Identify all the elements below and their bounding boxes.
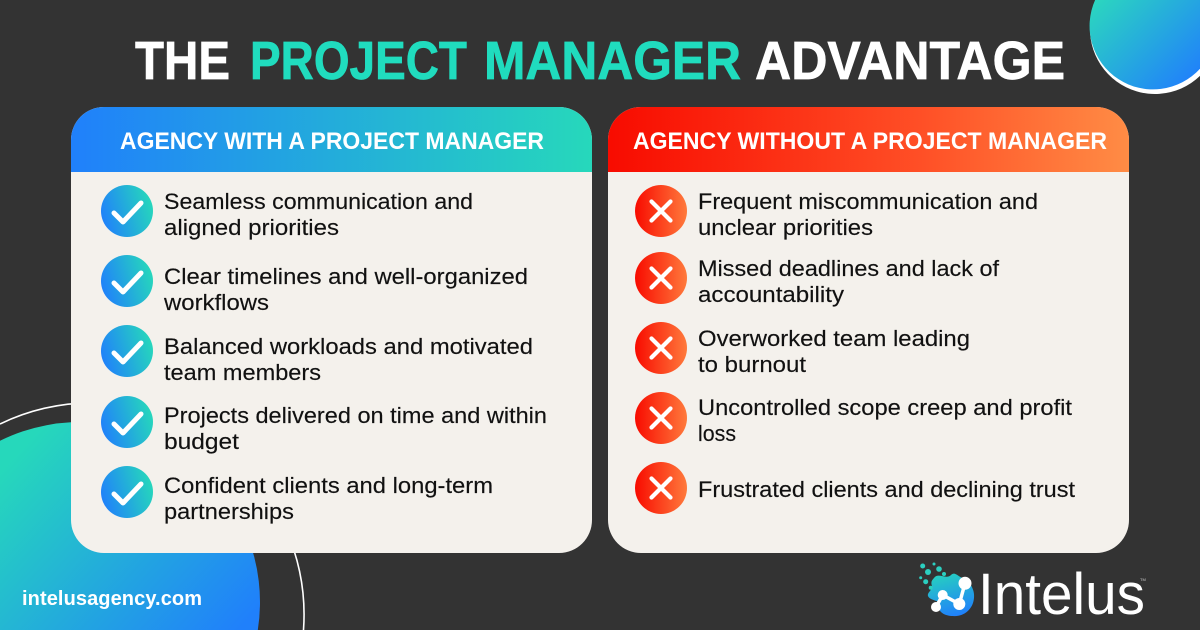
item: frequent miscommunication: unclear priorities	[698, 215, 873, 240]
item: missed deadlines	[635, 252, 1000, 307]
item: seamless communication: Seamless communication and	[164, 189, 473, 214]
item: overworked team	[635, 322, 970, 377]
item: seamless communication	[101, 185, 473, 240]
title	[135, 31, 1065, 91]
panel header	[71, 107, 592, 172]
item: frequent miscommunication: Frequent miscommunication and	[698, 189, 1038, 214]
website url: intelusagency.com	[22, 588, 202, 610]
item: scope creep: loss	[698, 421, 736, 446]
trademark: TM	[1140, 577, 1146, 582]
title: PROJECT	[250, 31, 467, 91]
logo icon	[919, 562, 974, 616]
panel: agency without a project manager	[608, 107, 1129, 553]
item: confident clients: partnerships	[164, 499, 294, 524]
item: missed deadlines: accountability	[698, 282, 845, 307]
item: frequent miscommunication	[635, 185, 1038, 240]
title: MANAGER	[484, 31, 741, 91]
panel body	[71, 107, 592, 553]
title: ADVANTAGE	[755, 31, 1065, 91]
panel body	[608, 107, 1129, 553]
item: scope creep: Uncontrolled scope creep and profit	[698, 395, 1073, 420]
item: seamless communication: aligned priorities	[164, 215, 339, 240]
item: clear timelines: workflows	[163, 290, 269, 315]
title: THE	[135, 31, 230, 91]
item: frustrated clients	[635, 462, 1076, 514]
logo: Intelus	[919, 562, 1146, 627]
panel header	[608, 107, 1129, 172]
panel: agency with a project manager	[71, 107, 592, 553]
header text: AGENCY WITHOUT A PROJECT MANAGER	[633, 128, 1107, 155]
item: balanced workloads: team members	[164, 360, 321, 385]
item: balanced workloads	[101, 325, 533, 385]
item: overworked team: to burnout	[698, 352, 807, 377]
item: confident clients	[101, 466, 493, 524]
decorative circle: top right	[1090, 0, 1200, 94]
item: clear timelines	[101, 255, 528, 315]
item: projects delivered	[101, 396, 547, 454]
item: projects delivered: budget	[164, 429, 240, 454]
item: clear timelines: Clear timelines and well-organized	[164, 264, 528, 289]
item: scope creep	[635, 392, 1073, 446]
item: projects delivered: Projects delivered on time and within	[164, 403, 547, 428]
header text: AGENCY WITH A PROJECT MANAGER	[120, 128, 544, 155]
item: missed deadlines: Missed deadlines and lack of	[698, 256, 1000, 281]
item: balanced workloads: Balanced workloads and motivated	[164, 334, 533, 359]
logo wordmark: Intelus	[978, 562, 1145, 627]
decorative circle: bottom left with ring	[0, 403, 304, 630]
item: frustrated clients: Frustrated clients and declining trust	[698, 477, 1076, 502]
item: overworked team: Overworked team leading	[698, 326, 970, 351]
item: confident clients: Confident clients and long-term	[164, 473, 493, 498]
